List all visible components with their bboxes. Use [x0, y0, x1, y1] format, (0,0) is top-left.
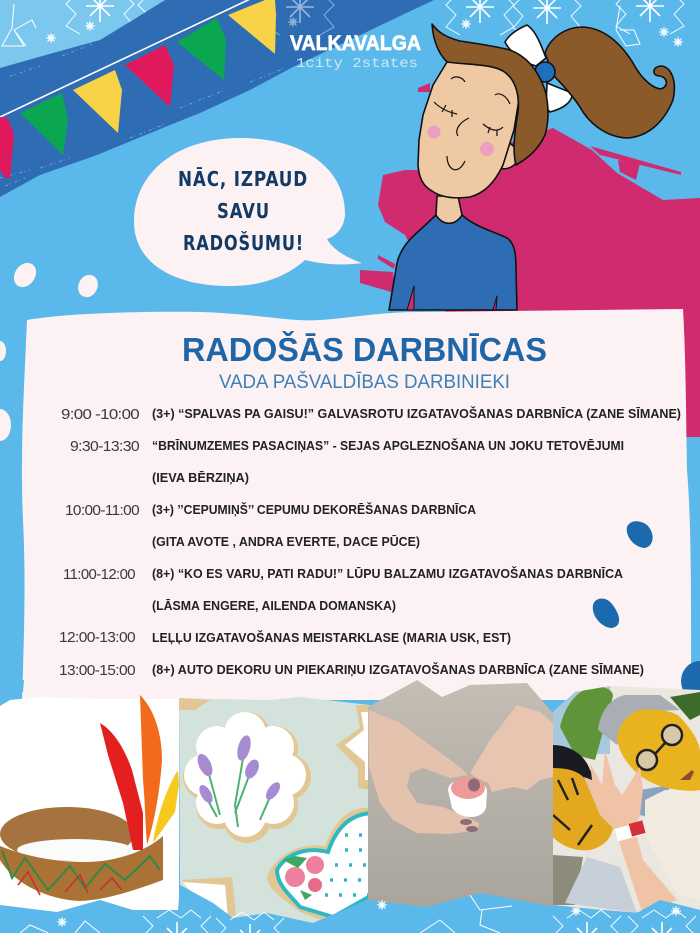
- waving arm: [584, 750, 677, 915]
- schedule: (IEVA BĒRZIŅA): [152, 471, 249, 485]
- shirt folds: [407, 286, 497, 310]
- wristband: [614, 825, 645, 842]
- hair: [432, 24, 548, 165]
- schedule: [59, 406, 681, 679]
- band opening: [17, 839, 133, 861]
- feathers: [100, 723, 143, 850]
- schedule: 11:00-12:00: [63, 566, 135, 583]
- bow: [505, 25, 572, 112]
- bunting flags: [0, 0, 276, 178]
- panel: [0, 309, 691, 700]
- schedule: LEĻĻU IZGATAVOŠANAS MEISTARKLASE (MARIA USK, EST): [152, 630, 511, 645]
- blue blobs: [593, 521, 700, 701]
- left hand: [369, 710, 479, 834]
- paving and denim: [553, 855, 583, 905]
- facial features: [434, 77, 510, 170]
- top snowflake pattern: [0, 0, 684, 72]
- schedule: (3+) ’’CEPUMIŅŠ’’ CEPUMU DEKORĒŠANAS DARBNĪCA: [152, 502, 476, 517]
- band back: [0, 807, 134, 861]
- heading: RADOŠĀS DARBNĪCAS: [182, 330, 547, 368]
- blue corner left: [0, 680, 24, 705]
- t-shirt: [645, 790, 700, 900]
- shirt: [389, 215, 517, 310]
- tree: [560, 687, 613, 760]
- schedule: (8+) AUTO DEKORU UN PIEKARIŅU IZGATAVOŠANAS DARBNĪCA (ZANE SĪMANE): [152, 662, 644, 677]
- photo: feather headband: [0, 695, 179, 912]
- bubble text: [178, 167, 308, 255]
- logo: 1city 2states: [296, 56, 418, 72]
- schedule: 12:00-13:00: [59, 629, 135, 646]
- neck: [436, 196, 462, 223]
- schedule: 13:00-15:00: [59, 662, 135, 679]
- bubble text: SAVU: [217, 199, 270, 223]
- cheeks: [428, 126, 440, 138]
- white dots: [0, 259, 101, 441]
- subheading: VADA PAŠVALDĪBAS DARBINIEKI: [219, 371, 510, 393]
- speech bubble: [134, 138, 362, 286]
- ear: [500, 143, 518, 169]
- bubble text: RADOŠUMU!: [183, 231, 304, 255]
- schedule: 9:30-13:30: [70, 438, 139, 455]
- logo: VALKAVALGA: [290, 32, 421, 55]
- child right face: [617, 709, 700, 791]
- child right hat: [598, 695, 680, 745]
- girl character: [389, 24, 674, 310]
- brush stripe: [0, 0, 434, 197]
- photo: lip balm: [365, 678, 557, 910]
- face: [418, 62, 520, 198]
- bubble text: NĀC, IZPAUD: [178, 167, 308, 191]
- schedule: (3+) “SPALVAS PA GAISU!” GALVASROTU IZGATAVOŠANAS DARBNĪCA (ZANE SĪMANE): [152, 406, 681, 421]
- bottom torn strip: [0, 885, 700, 933]
- schedule: (GITA AVOTE , ANDRA EVERTE, DACE PŪCE): [152, 535, 420, 549]
- right hand: [470, 705, 553, 792]
- schedule: 9:00 -10:00: [61, 406, 139, 423]
- corner cookies: [336, 705, 372, 790]
- heart cookie: [267, 808, 372, 925]
- child left: [553, 745, 592, 780]
- pink brush stroke: [360, 83, 700, 437]
- schedule: (LĀSMA ENGERE, AILENDA DOMANSKA): [152, 599, 396, 613]
- flower cookie: [183, 712, 311, 843]
- schedule: “BRĪNUMZEMES PASACIŅAS” - SEJAS APGLEZNOŠANA UN JOKU TETOVĒJUMI: [152, 438, 624, 453]
- photo: face painting: [550, 684, 700, 915]
- band front: [0, 836, 163, 901]
- logo: [290, 32, 421, 72]
- hair tie: [535, 62, 555, 82]
- lip balm: [448, 779, 487, 817]
- schedule: (8+) “KO ES VARU, PATI RADU!” LŪPU BALZAMU IZGATAVOŠANAS DARBNĪCA: [152, 566, 623, 581]
- schedule: 10:00-11:00: [65, 502, 139, 519]
- photo: cookies: [179, 695, 372, 925]
- ponytail: [545, 27, 674, 138]
- bunting string: [0, 0, 265, 117]
